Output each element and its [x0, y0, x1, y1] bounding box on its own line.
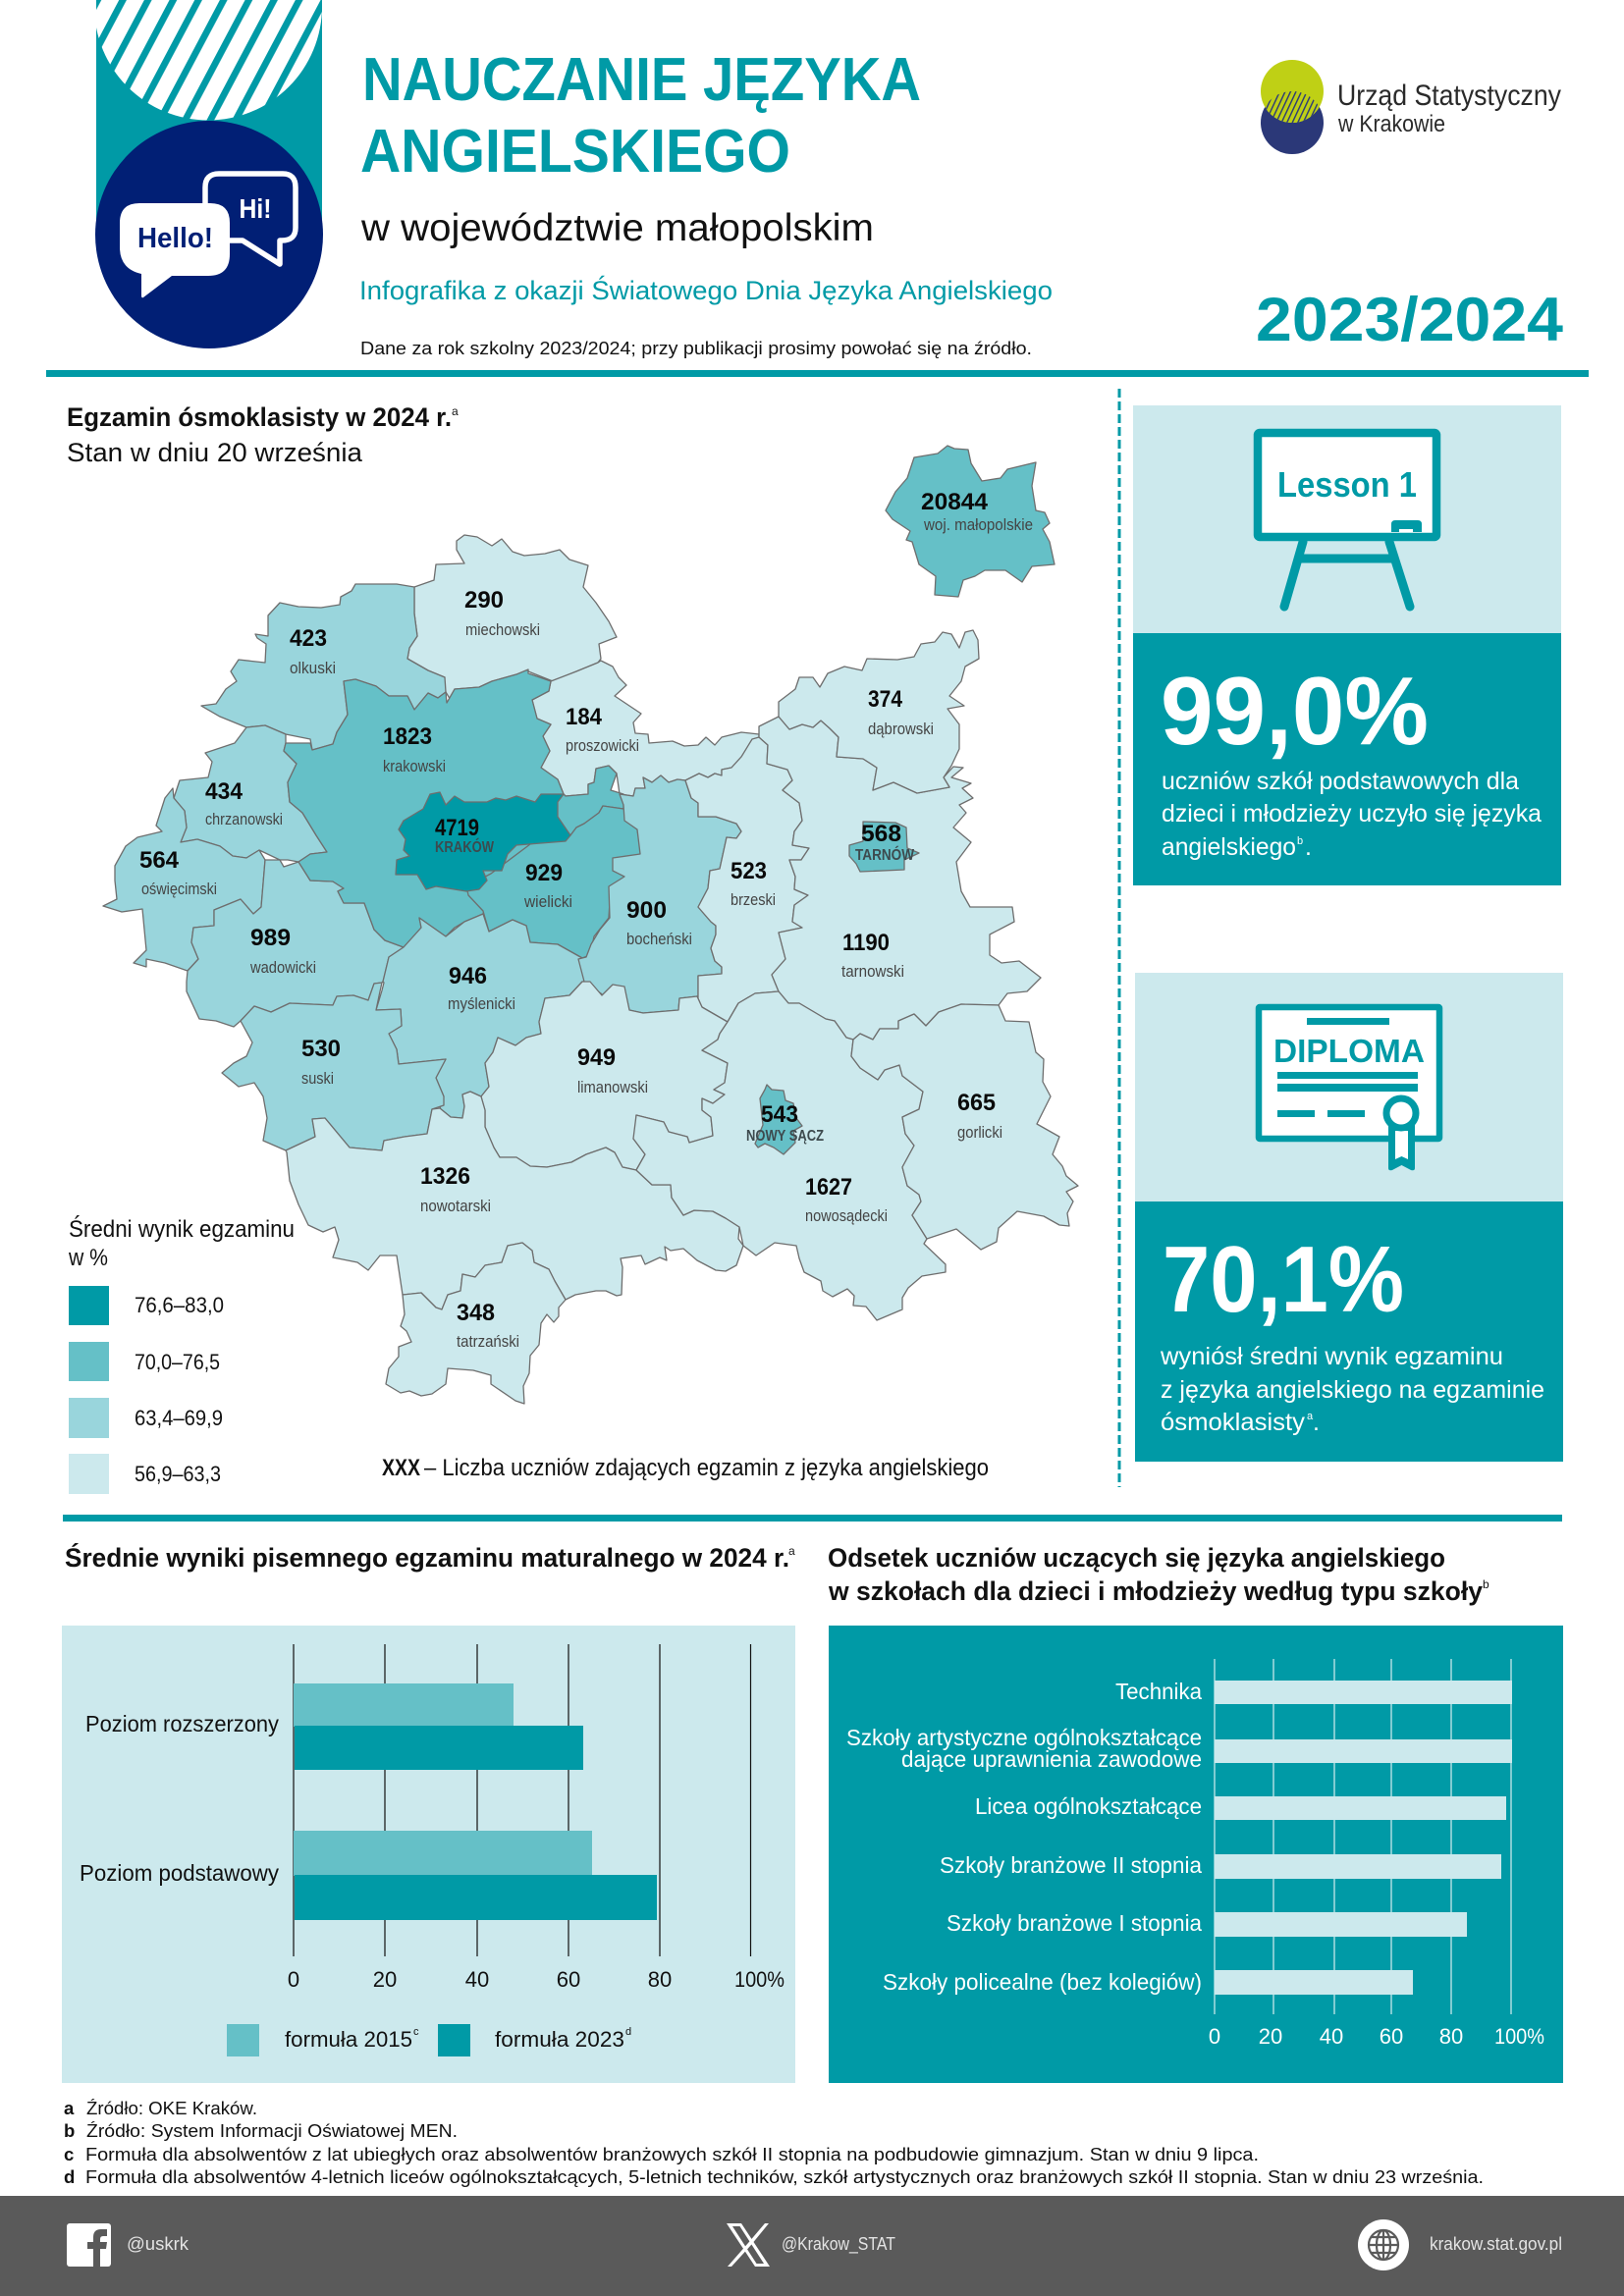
map legend: 70,0–76,5 — [135, 1350, 220, 1374]
region: Tarnów — [849, 822, 919, 872]
region: nowotarski — [286, 1092, 743, 1309]
map note: XXX — [382, 1455, 420, 1481]
map labels: 929 — [525, 860, 563, 886]
footer bar — [0, 2196, 1624, 2296]
map labels: 1823 — [383, 723, 432, 750]
bars: podstawowy — [294, 1831, 657, 1920]
panel: school type bar chart: 40 — [1320, 2024, 1343, 2049]
panel: matura bar chart: 20 — [373, 1967, 397, 1992]
footnotes: Źródło: OKE Kraków. — [86, 2098, 257, 2118]
map heading — [67, 402, 459, 467]
title: ANGIELSKIEGO — [360, 118, 790, 186]
map labels: tatrzański — [457, 1333, 519, 1351]
map labels: NOWY SĄCZ — [746, 1128, 824, 1145]
legend: formula: c — [413, 2026, 419, 2038]
subtitle: w województwie małopolskim — [360, 207, 874, 249]
footer bar: krakow.stat.gov.pl — [1430, 2234, 1562, 2254]
map labels: dąbrowski — [868, 721, 934, 738]
panel: 99,0%: dzieci i młodzieży uczyło się języka — [1162, 800, 1542, 828]
heading: share of pupils — [828, 1543, 1489, 1606]
region: wadowicki — [187, 860, 404, 1027]
panel: matura bar chart: Poziom rozszerzony — [85, 1711, 279, 1736]
icon: X — [727, 2223, 770, 2267]
map labels: nowosądecki — [805, 1207, 888, 1225]
map labels: wielicki — [523, 893, 572, 911]
region: Kraków — [396, 792, 570, 891]
footer bar: @Krakow_STAT — [782, 2234, 895, 2255]
heading: share of pupils: Odsetek uczniów uczących się języka angielskiego — [828, 1543, 1445, 1573]
title: NAUCZANIE JĘZYKA — [362, 46, 921, 114]
map labels: 290 — [464, 587, 504, 614]
map labels: limanowski — [577, 1079, 648, 1096]
map labels: suski — [301, 1070, 334, 1088]
panel: 99,0% — [1133, 405, 1561, 885]
map legend: w % — [68, 1245, 108, 1271]
region: bocheński — [578, 775, 741, 1013]
legend: formula: formuła 2015 — [285, 2027, 412, 2052]
panel: matura bar chart: 0 — [288, 1967, 299, 1992]
header ribbon with speech bubbles — [94, 0, 323, 348]
legend: formula: d — [625, 2026, 631, 2038]
region: brzeski — [685, 737, 809, 1022]
panel: 70,1%: wyniósł średni wynik egzaminu — [1160, 1343, 1503, 1370]
bar labels — [846, 1679, 1202, 1995]
region: tarnowski — [759, 717, 1041, 1040]
region: oświęcimski — [103, 788, 265, 971]
icon: lesson board — [1258, 433, 1436, 607]
map labels: 374 — [868, 686, 903, 713]
panel: matura bar chart: Poziom podstawowy — [80, 1860, 279, 1886]
bar labels: Szkoły policealne (bez kolegiów) — [883, 1969, 1202, 1995]
map legend: 76,6–83,0 — [135, 1293, 224, 1317]
map labels: 4719 — [435, 815, 479, 841]
map labels: 543 — [761, 1101, 798, 1128]
map labels: 1190 — [842, 930, 890, 956]
panel: 99,0%: . — [1305, 833, 1312, 861]
title — [360, 46, 921, 186]
map labels: miechowski — [465, 621, 540, 639]
icon: facebook — [67, 2223, 111, 2267]
map note: – Liczba uczniów zdających egzamin z języka angielskiego — [424, 1455, 989, 1481]
map labels: 184 — [566, 704, 603, 730]
heading: share of pupils: b — [1483, 1577, 1489, 1591]
heading: matura results: Średnie wyniki pisemnego egzaminu maturalnego w 2024 r. — [65, 1542, 789, 1573]
panel: 70,1%: 70,1% — [1163, 1227, 1404, 1332]
footnotes — [64, 2098, 1484, 2187]
map labels: wadowicki — [249, 959, 316, 977]
bar labels: Szkoły artystyczne ogólnokształcące — [846, 1725, 1202, 1750]
map labels: TARNÓW — [855, 846, 914, 864]
panel: 99,0%: 99,0% — [1161, 657, 1429, 765]
region: olkuski — [201, 584, 446, 750]
choropleth map of powiats — [103, 446, 1078, 1404]
map labels: 523 — [731, 858, 767, 884]
panel: school type bar chart — [829, 1626, 1563, 2083]
region: gorlicki — [851, 1004, 1078, 1250]
panel: school type bar chart: 20 — [1259, 2024, 1282, 2049]
map labels: 989 — [250, 925, 291, 951]
footnotes: b — [64, 2120, 75, 2141]
map labels: krakowski — [383, 758, 446, 775]
map labels: proszowicki — [566, 737, 639, 755]
region: proszowicki — [532, 661, 759, 796]
panel: 99,0%: b — [1297, 835, 1303, 847]
region: limanowski — [481, 982, 728, 1170]
panel: matura bar chart: 40 — [465, 1967, 489, 1992]
footnotes: Źródło: System Informacji Oświatowej MEN. — [86, 2120, 458, 2141]
heading: share of pupils: w szkołach dla dzieci i młodzieży według typu szkoły — [828, 1576, 1483, 1606]
map labels: 1627 — [805, 1174, 852, 1201]
school year: 2023/2024 — [1256, 286, 1563, 354]
map heading: a — [452, 404, 459, 418]
icon: Hi bubble: Hi! — [240, 193, 271, 224]
occasion line: Infografika z okazji Światowego Dnia Języka Angielskiego — [359, 274, 1053, 305]
map labels: 1326 — [420, 1163, 470, 1190]
panel: school type bar chart: 60 — [1380, 2024, 1403, 2049]
map labels: chrzanowski — [205, 811, 283, 828]
source note: Dane za rok szkolny 2023/2024; przy publikacji prosimy powołać się na źródło. — [360, 338, 1032, 358]
region: tatrzański — [386, 1243, 566, 1404]
map labels: nowotarski — [420, 1198, 491, 1215]
logo: Urząd Statystyczny w Krakowie: w Krakowie — [1337, 111, 1445, 137]
map labels: 568 — [861, 821, 901, 847]
map labels: KRAKÓW — [435, 838, 494, 856]
region: miechowski — [407, 535, 617, 702]
map legend: 63,4–69,9 — [135, 1406, 223, 1430]
map heading: Stan w dniu 20 września — [67, 438, 363, 467]
bars — [1215, 1681, 1512, 1995]
map labels: 564 — [139, 847, 180, 874]
panel: 70,1%: ósmoklasisty — [1161, 1409, 1306, 1436]
region: chrzanowski — [174, 725, 327, 862]
map labels: 348 — [457, 1300, 495, 1326]
panel: school type bar chart: 100% — [1494, 2024, 1544, 2049]
legend: formula — [227, 2024, 631, 2056]
region: dąbrowski — [779, 630, 979, 793]
map heading: Egzamin ósmoklasisty w 2024 r. — [67, 402, 452, 432]
panel: matura bar chart: 60 — [557, 1967, 580, 1992]
panel: matura bar chart: 80 — [648, 1967, 672, 1992]
footnotes: Formuła dla absolwentów 4-letnich liceów ogólnokształcących, 5-letnich techników, szkół artystycznych oraz branżowych szkół II stopnia. Stan w dniu 23 września. — [85, 2166, 1484, 2187]
region: krakowski — [284, 669, 623, 947]
region: nowosądecki — [633, 991, 946, 1320]
panel: 70,1%: . — [1313, 1409, 1320, 1436]
footer bar: @uskrk — [127, 2234, 189, 2254]
map labels: bocheński — [626, 931, 692, 948]
map legend — [68, 1215, 295, 1494]
map labels: 423 — [290, 625, 327, 652]
map labels: 20844 — [921, 489, 989, 515]
map labels: tarnowski — [841, 963, 904, 981]
bar labels: Licea ogólnokształcące — [975, 1793, 1202, 1819]
panel: matura bar chart: 100% — [734, 1967, 785, 1992]
region: myślenicki — [376, 914, 584, 1118]
panel: school type bar chart: 0 — [1209, 2024, 1220, 2049]
footnotes: c — [64, 2144, 74, 2164]
footnotes: Formuła dla absolwentów z lat ubiegłych oraz absolwentów branżowych szkół II stopnia na podbudowie gimnazjum. Stan w dniu 9 lipca. — [85, 2144, 1259, 2164]
region: suski — [222, 983, 446, 1150]
logo: Urząd Statystyczny w Krakowie: Urząd Statystyczny — [1337, 80, 1561, 112]
region: wielicki — [466, 806, 641, 958]
bar labels: Szkoły branżowe II stopnia — [940, 1852, 1202, 1878]
panel: 70,1%: z języka angielskiego na egzaminie — [1161, 1376, 1544, 1404]
map labels: 530 — [301, 1036, 341, 1062]
icon: lesson board: Lesson 1 — [1277, 464, 1417, 505]
legend: formula: formuła 2023 — [495, 2027, 624, 2052]
bar labels: dające uprawnienia zawodowe — [901, 1746, 1202, 1772]
map labels: oświęcimski — [141, 881, 217, 898]
map labels: 949 — [577, 1044, 616, 1071]
map labels: brzeski — [731, 891, 776, 909]
icon: diploma — [1259, 1007, 1439, 1170]
map labels: 434 — [205, 778, 244, 805]
icon: globe — [1358, 2219, 1409, 2270]
map labels: myślenicki — [448, 995, 515, 1013]
panel: 99,0%: uczniów szkół podstawowych dla — [1162, 768, 1519, 795]
region: województwo inset — [886, 446, 1055, 597]
panel: school type bar chart: 80 — [1439, 2024, 1463, 2049]
map legend: 56,9–63,3 — [135, 1462, 221, 1486]
footnotes: d — [64, 2166, 75, 2187]
icon: Hi bubble — [205, 174, 296, 264]
map labels — [139, 489, 1033, 1351]
footnotes: a — [64, 2098, 75, 2118]
panel: 70,1% — [1135, 973, 1563, 1462]
map labels: olkuski — [290, 660, 336, 677]
bar labels: Technika — [1115, 1679, 1202, 1704]
map legend: Średni wynik egzaminu — [69, 1215, 295, 1243]
map labels: 946 — [449, 963, 487, 989]
bar labels: Szkoły branżowe I stopnia — [947, 1910, 1202, 1936]
map labels: 665 — [957, 1090, 996, 1116]
panel: 99,0%: angielskiego — [1162, 833, 1296, 861]
heading: matura results: a — [788, 1544, 795, 1558]
bars: rozszerzony — [294, 1683, 583, 1770]
panel: matura bar chart — [62, 1626, 795, 2083]
logo: Urząd Statystyczny w Krakowie — [1261, 60, 1561, 154]
map labels: woj. małopolskie — [923, 516, 1033, 534]
panel: 70,1%: a — [1307, 1411, 1314, 1422]
map labels: 900 — [626, 897, 667, 924]
region: Nowy Sącz — [755, 1085, 802, 1154]
icon: Hello bubble: Hello! — [137, 223, 213, 254]
map labels: gorlicki — [957, 1124, 1002, 1142]
icon: Hello bubble — [120, 203, 230, 297]
icon: diploma: DIPLOMA — [1273, 1033, 1425, 1069]
